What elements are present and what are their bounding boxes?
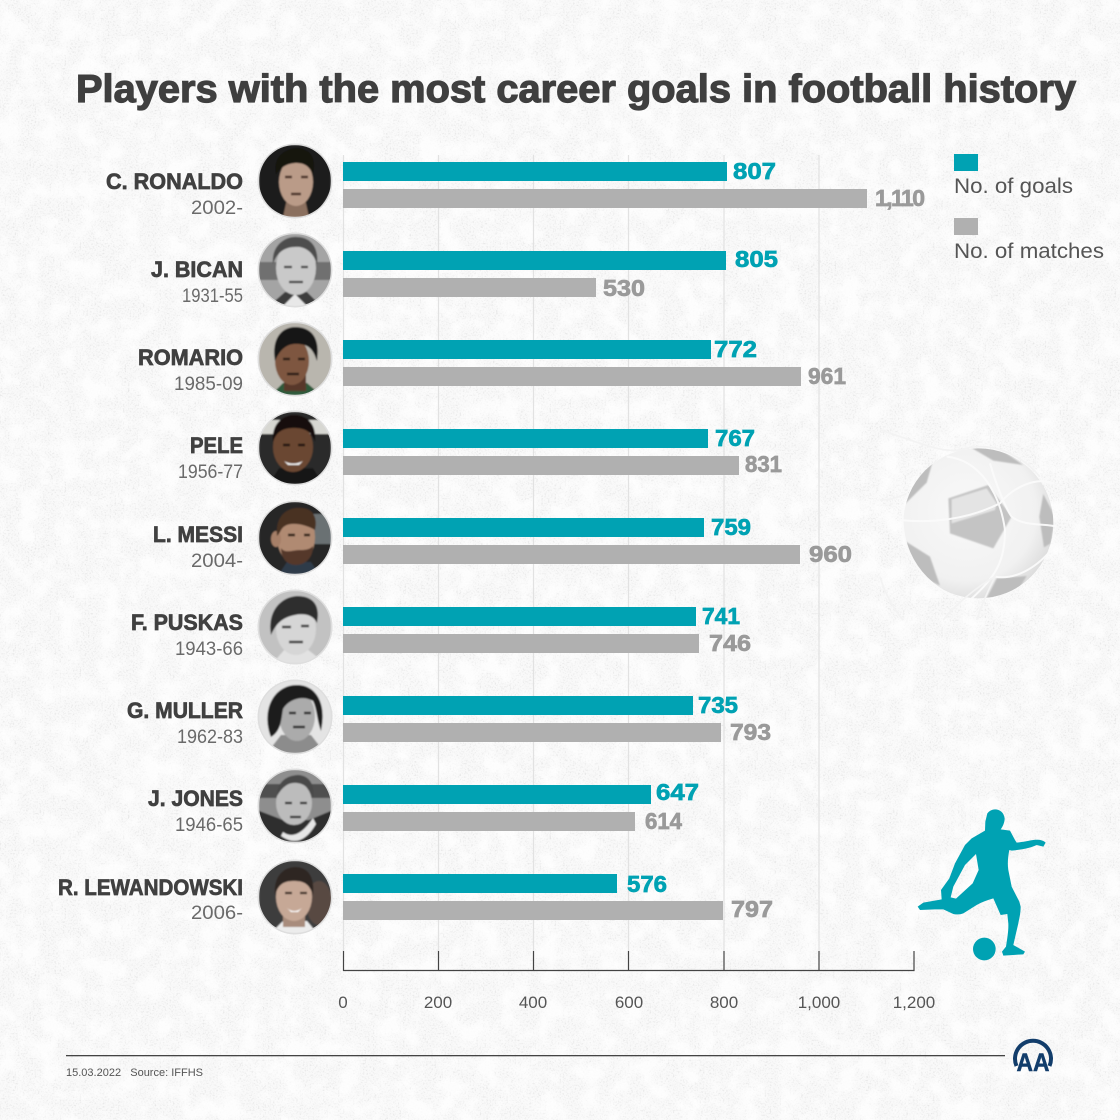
player labels: ROMARIO (138, 345, 243, 370)
matches bars (343, 189, 867, 920)
goals values: 741 (702, 603, 740, 629)
goals values (627, 158, 778, 897)
axis baseline and ticks (343, 951, 914, 971)
illustration: football in net (880, 430, 1057, 620)
player labels (58, 169, 243, 924)
bar chart (338, 155, 935, 1012)
axis labels: 400 (519, 993, 547, 1012)
matches values: 746 (709, 630, 751, 656)
axis labels: 800 (710, 993, 738, 1012)
player labels: 1956-77 (178, 462, 243, 483)
player labels: 1946-65 (175, 815, 243, 836)
player labels: 1985-09 (174, 374, 243, 395)
player labels: J. JONES (148, 786, 243, 811)
grid lines (344, 155, 819, 951)
goals values: 759 (711, 514, 751, 540)
player labels: 2002- (191, 198, 243, 219)
matches values: 1,110 (875, 185, 925, 211)
player labels: 1962-83 (177, 727, 243, 748)
portrait: J. Jones (257, 768, 333, 844)
matches values (603, 185, 925, 922)
player labels: 2006- (191, 903, 243, 924)
matches values: 960 (809, 541, 852, 567)
portrait: Romario (258, 322, 332, 396)
legend: matches (954, 218, 1104, 263)
player labels: G. MULLER (127, 698, 243, 723)
goals bars (343, 162, 727, 893)
axis labels: 0 (338, 993, 348, 1012)
portrait: Pele (258, 410, 332, 486)
axis labels: 1,200 (893, 993, 935, 1012)
player labels: 1931-55 (182, 286, 243, 307)
goals values: 576 (627, 871, 667, 897)
axis labels: 600 (615, 993, 643, 1012)
player labels: 1943-66 (175, 639, 243, 660)
portrait: C. Ronaldo (258, 144, 332, 218)
goals values: 735 (698, 692, 738, 718)
player labels: J. BICAN (151, 257, 243, 282)
axis labels (338, 993, 935, 1012)
portrait: R. Lewandowski (258, 860, 332, 934)
player labels: 2004- (191, 551, 243, 572)
goals values: 807 (733, 158, 776, 184)
goals values: 647 (656, 779, 699, 805)
portrait: L. Messi (258, 500, 332, 576)
matches values: 614 (645, 808, 682, 834)
legend: goals (954, 154, 1073, 198)
legend (954, 154, 1104, 263)
title: Players with the most career goals in football history (76, 68, 1076, 111)
matches values: 797 (731, 896, 773, 922)
legend: matches: No. of matches (954, 240, 1104, 263)
axis labels: 1,000 (798, 993, 840, 1012)
player labels: L. MESSI (153, 522, 243, 547)
goals values: 772 (714, 336, 757, 362)
icon: footballer silhouette (918, 809, 1046, 960)
icon: ball at feet (973, 938, 996, 960)
player labels: C. RONALDO (106, 169, 243, 194)
player labels: PELE (190, 433, 243, 458)
portrait: F. Puskas (258, 590, 332, 664)
footer divider (66, 1055, 1005, 1056)
axis labels: 200 (424, 993, 452, 1012)
goals values: 805 (735, 246, 778, 272)
portrait: G. Muller (258, 680, 332, 754)
matches values: 530 (603, 275, 645, 301)
legend: goals: No. of goals (954, 175, 1073, 198)
player labels: R. LEWANDOWSKI (58, 875, 243, 900)
portrait: J. Bican (258, 232, 332, 308)
goals values: 767 (715, 425, 755, 451)
matches values: 831 (745, 451, 782, 477)
player labels: F. PUSKAS (131, 610, 243, 635)
matches values: 961 (808, 363, 846, 389)
logo: AA: AA (1016, 1049, 1050, 1077)
footer: date and source: 15.03.2022 Source: IFFHS (66, 1067, 203, 1079)
matches values: 793 (730, 719, 771, 745)
